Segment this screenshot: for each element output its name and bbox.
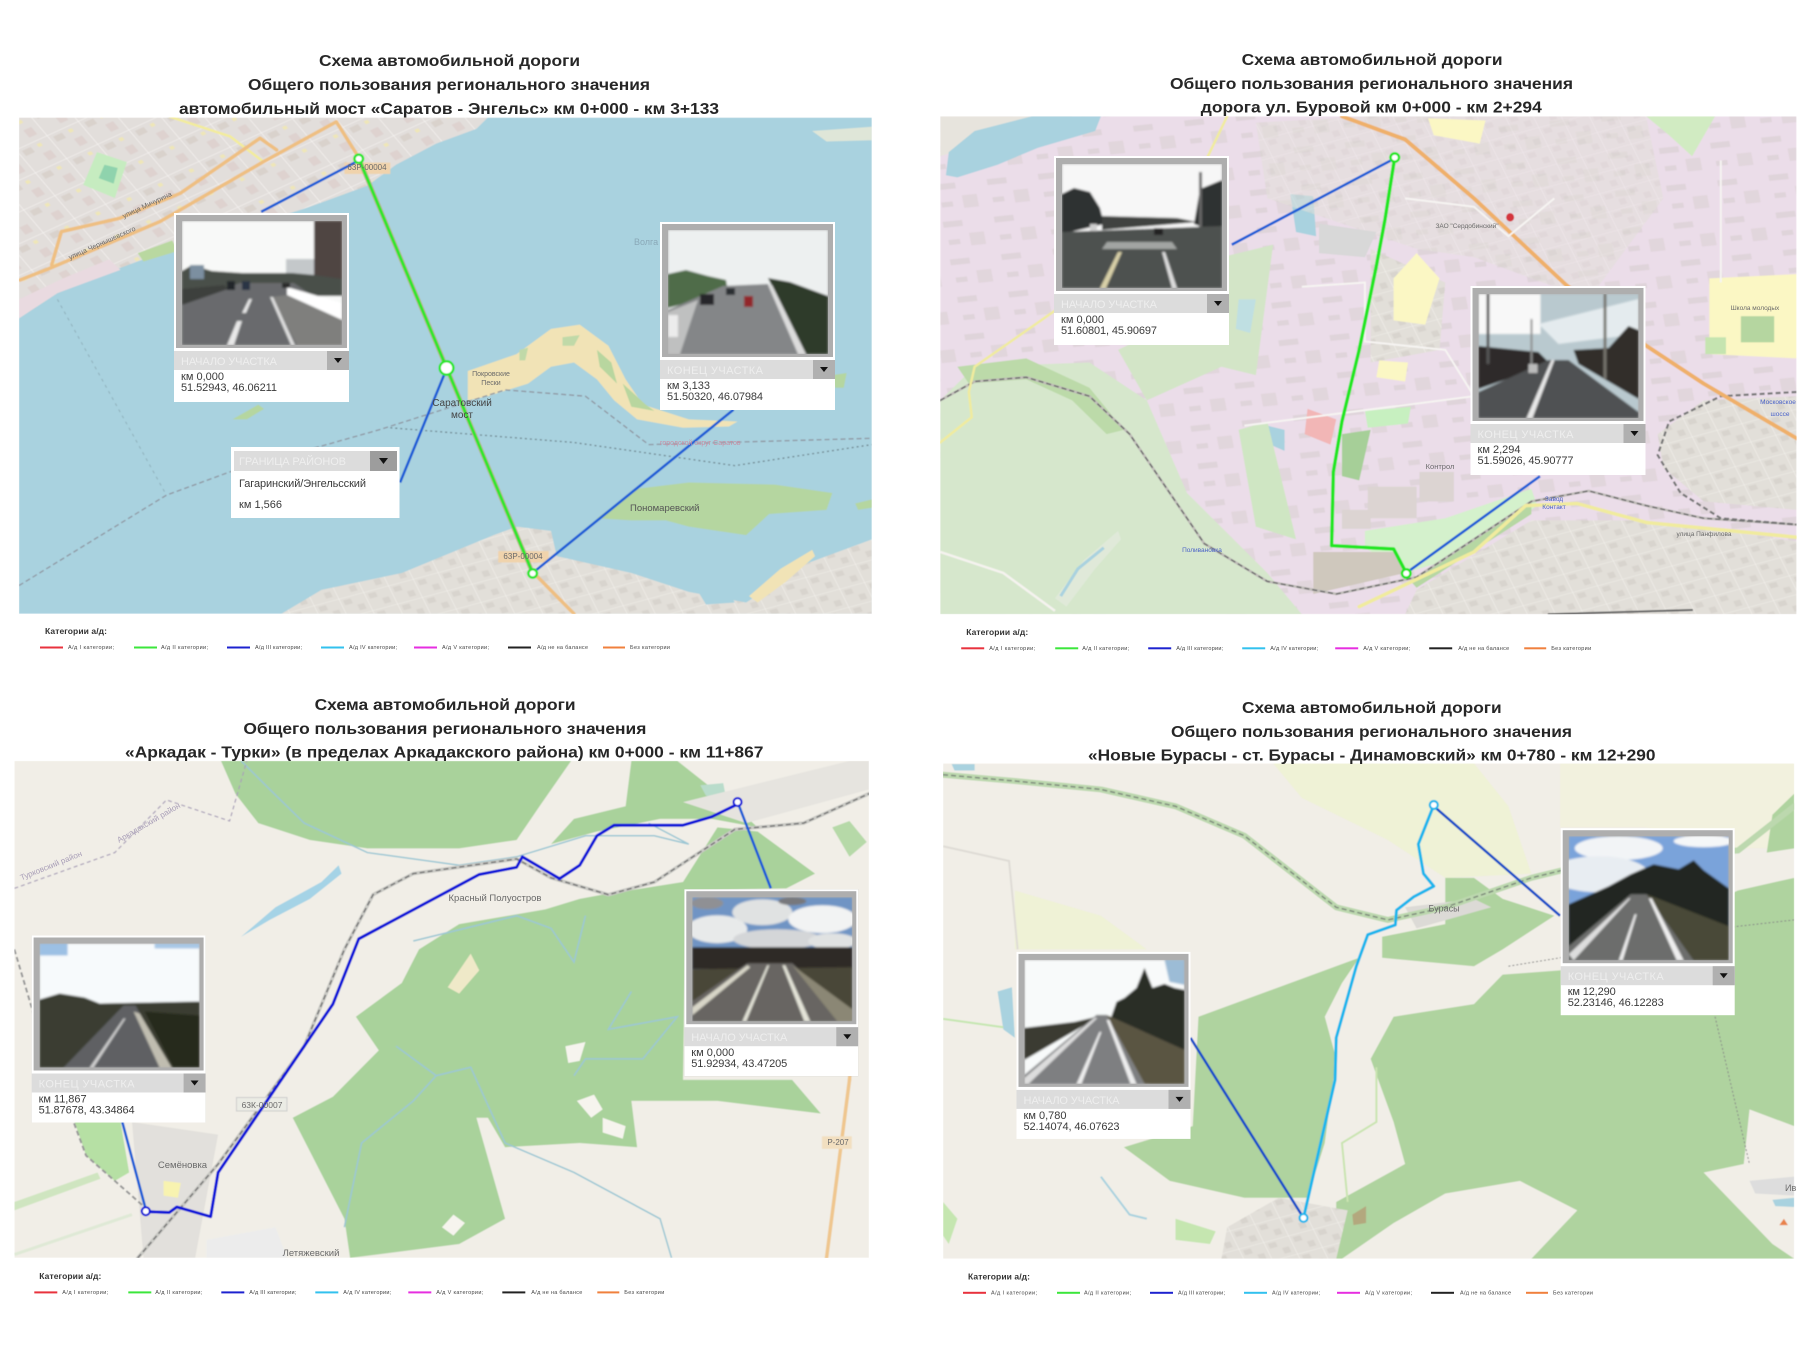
map labels: panel 3: Летяжевский: [283, 1248, 339, 1259]
title: panel 1: [179, 53, 719, 118]
legend: panel 1: А/д IV категории;: [349, 645, 397, 651]
map labels: panel 1: [68, 163, 741, 561]
callout: start of section: 51.60801, 45.90697: [1061, 325, 1157, 337]
panel: Arkadak - Turki: [14, 697, 869, 1296]
map labels: panel 3: [19, 801, 849, 1259]
map labels: panel 2: шоссе: [1771, 411, 1790, 418]
callout: end of section: [660, 222, 835, 410]
callout: end of section: КОНЕЦ УЧАСТКА: [1568, 971, 1664, 983]
map labels: panel 1: Пески: [481, 380, 501, 387]
map labels: panel 1: улица Чернышевского: [68, 226, 137, 262]
title: panel 2: дорога ул. Буровой км 0+000 - км 2+294: [1201, 100, 1542, 116]
callout: end of section: [1549, 828, 1735, 1015]
legend: panel 2: А/д II категории;: [1082, 646, 1130, 652]
callout: end of section: 51.50320, 46.07984: [667, 391, 763, 403]
callout: start of section: 52.14074, 46.07623: [1024, 1121, 1120, 1133]
callout: start of section: НАЧАЛО УЧАСТКА: [1024, 1095, 1120, 1107]
callout: district boundary: км 1,566: [239, 499, 282, 511]
legend: panel 3: Категории а/д:: [39, 1271, 101, 1281]
map labels: panel 3: Р-207: [827, 1138, 849, 1147]
map labels: panel 1: Волга: [634, 237, 658, 247]
legend: panel 3: А/д V категории;: [436, 1290, 484, 1296]
callout: start of section: [684, 889, 858, 1076]
map labels: panel 1: 63Р-00004: [503, 552, 543, 561]
map labels: panel 3: Семёновка: [158, 1160, 208, 1171]
legend: panel 2: А/д не на балансе: [1458, 646, 1509, 652]
photo: field road: [40, 944, 200, 1068]
legend: panel 3: А/д II категории;: [155, 1290, 203, 1296]
map labels: panel 3: Аркадакский район: [116, 801, 182, 845]
photo: city road: [182, 221, 342, 345]
legend: panel 4: Без категории: [1553, 1290, 1593, 1296]
callout: start of section: НАЧАЛО УЧАСТКА: [181, 356, 278, 368]
map labels: panel 3: 63К-00007: [242, 1100, 283, 1110]
map labels: panel 2: Контакт: [1542, 504, 1566, 511]
callout: end of section: [32, 936, 206, 1122]
map labels: panel 2: [1182, 222, 1796, 554]
legend: panel 3: А/д I категории;: [62, 1290, 109, 1296]
callout: start of section: НАЧАЛО УЧАСТКА: [1061, 299, 1158, 311]
callout: end of section: 52.23146, 46.12283: [1568, 997, 1664, 1009]
map labels: panel 2: Завод: [1545, 496, 1563, 503]
map labels: panel 3: Турковский район: [19, 849, 83, 882]
legend: panel 4: Категории а/д:: [968, 1271, 1030, 1281]
photo: crossing: [1062, 164, 1222, 288]
map: Burasy forest area: [943, 763, 1794, 1259]
legend: panel 4: А/д IV категории;: [1272, 1290, 1320, 1296]
legend: panel 1: А/д I категории;: [68, 645, 114, 651]
legend: panel 2: А/д III категории;: [1176, 646, 1224, 652]
callout: start of section: км 0,000: [1061, 314, 1104, 326]
panel: Novye Burasy - st. Burasy - Dinamovsky: [943, 700, 1796, 1296]
title: panel 4: Общего пользования регионального значения: [1171, 724, 1572, 741]
callout: district boundary: ГРАНИЦА РАЙОНОВ: [239, 455, 346, 468]
callout: end of section: км 3,133: [667, 380, 710, 392]
title: panel 1: автомобильный мост «Саратов - Энгельс» км 0+000 - км 3+133: [179, 101, 719, 118]
panel: Burova street: [940, 52, 1797, 652]
title: panel 4: «Новые Бурасы - ст. Бурасы - Динамовский» км 0+780 - км 12+290: [1088, 748, 1656, 764]
map labels: panel 2: Поливановка: [1182, 547, 1222, 554]
legend: panel 2: [961, 627, 1591, 652]
map labels: panel 1: Саратовский: [432, 398, 492, 409]
callout: start of section: 51.92934, 43.47205: [691, 1058, 787, 1070]
panel: bridge Saratov - Engels: [19, 53, 872, 651]
title: panel 1: Схема автомобильной дороги: [319, 53, 580, 70]
photo: road under clouds: [687, 897, 856, 1021]
map: Arkadak forest area: [14, 761, 869, 1258]
title: panel 2: Общего пользования регионального значения: [1170, 76, 1573, 93]
callout: start of section: [1016, 952, 1190, 1139]
legend: panel 4: А/д I категории;: [991, 1290, 1037, 1296]
legend: panel 3: А/д IV категории;: [343, 1290, 392, 1296]
callout: end of section: км 11,867: [39, 1094, 87, 1106]
callout: end of section: [1470, 286, 1646, 475]
callout: start of section: км 0,000: [691, 1047, 734, 1059]
map labels: panel 1: городской округ Саратов: [660, 439, 741, 447]
callout: end of section: КОНЕЦ УЧАСТКА: [1478, 429, 1574, 441]
callout: start of section: км 0,780: [1024, 1110, 1066, 1122]
legend: panel 3: А/д не на балансе: [531, 1290, 582, 1296]
legend: panel 1: [40, 626, 670, 651]
legend: panel 1: А/д II категории;: [161, 645, 208, 651]
map labels: panel 1: улица Мичурина: [122, 191, 173, 220]
legend: panel 2: А/д I категории;: [989, 646, 1036, 652]
legend: panel 1: А/д III категории;: [255, 645, 302, 651]
photo: road with blue sky: [1568, 836, 1729, 960]
callout: start of section: 51.52943, 46.06211: [181, 382, 277, 394]
title: panel 1: Общего пользования регионального значения: [248, 77, 650, 94]
map labels: panel 1: Пономаревский: [630, 503, 699, 514]
legend: panel 1: Категории а/д:: [45, 626, 107, 636]
legend: panel 4: [963, 1271, 1593, 1296]
title: panel 4: Схема автомобильной дороги: [1242, 700, 1502, 717]
map labels: panel 4: Ив: [1785, 1183, 1796, 1193]
map labels: panel 2: ЗАО "Сердобинский": [1435, 222, 1499, 230]
map: Burova street area: [940, 116, 1797, 614]
legend: panel 1: А/д V категории;: [442, 645, 489, 651]
callout: start of section: [174, 213, 349, 402]
legend: panel 1: А/д не на балансе: [537, 645, 588, 651]
callout: district boundary: Гагаринский/Энгельсский: [239, 478, 366, 490]
map labels: panel 4: [1428, 904, 1796, 1193]
map labels: panel 1: мост: [451, 410, 473, 421]
callout: end of section: КОНЕЦ УЧАСТКА: [39, 1078, 135, 1090]
map labels: panel 1: Покровские: [472, 371, 510, 378]
legend: panel 4: А/д V категории;: [1365, 1290, 1412, 1296]
callout: end of section: 51.87678, 43.34864: [39, 1104, 135, 1116]
callout: district boundary: [231, 447, 400, 518]
legend: panel 3: [34, 1271, 664, 1296]
legend: panel 1: Без категории: [630, 645, 670, 651]
map labels: panel 2: Школа молодых: [1731, 305, 1780, 312]
title: panel 4: [1088, 700, 1656, 764]
map labels: panel 2: Московское: [1760, 399, 1796, 406]
callout: end of section: 51.59026, 45.90777: [1478, 455, 1574, 467]
map: Volga at Saratov and Engels: [19, 117, 872, 614]
legend: panel 4: А/д не на балансе: [1460, 1290, 1511, 1296]
map labels: panel 1: 63Р-00004: [347, 163, 387, 172]
photo: road with poles: [1478, 294, 1638, 418]
legend: panel 2: А/д V категории;: [1363, 646, 1411, 652]
legend: panel 2: Категории а/д:: [966, 627, 1028, 637]
title: panel 3: «Аркадак - Турки» (в пределах Аркадакского района) км 0+000 - км 11+867: [125, 744, 764, 762]
title: panel 3: Схема автомобильной дороги: [315, 697, 576, 714]
callout: start of section: км 0,000: [181, 371, 224, 383]
legend: panel 4: А/д II категории;: [1084, 1290, 1131, 1296]
legend: panel 2: Без категории: [1551, 646, 1591, 652]
map labels: panel 3: Красный Полуостров: [449, 893, 541, 904]
photo: road with poplars: [1024, 960, 1184, 1084]
callout: start of section: [1054, 156, 1229, 345]
callout: end of section: км 2,294: [1478, 444, 1520, 456]
legend: panel 3: А/д III категории;: [249, 1290, 297, 1296]
callout: end of section: км 12,290: [1568, 986, 1616, 998]
map labels: panel 2: улица Панфилова: [1676, 531, 1732, 538]
legend: panel 3: Без категории: [624, 1290, 664, 1296]
map labels: panel 4: Бурасы: [1428, 904, 1460, 914]
legend: panel 2: А/д IV категории;: [1270, 646, 1319, 652]
callout: end of section: КОНЕЦ УЧАСТКА: [667, 365, 764, 377]
legend: panel 4: А/д III категории;: [1178, 1290, 1225, 1296]
title: panel 2: Схема автомобильной дороги: [1242, 52, 1503, 69]
map labels: panel 2: Контрол: [1426, 462, 1454, 471]
callout: start of section: НАЧАЛО УЧАСТКА: [691, 1032, 788, 1044]
title: panel 3: Общего пользования регионального значения: [243, 721, 646, 738]
title: panel 2: [1170, 52, 1573, 116]
photo: bridge traffic: [668, 230, 828, 354]
title: panel 3: [125, 697, 764, 762]
